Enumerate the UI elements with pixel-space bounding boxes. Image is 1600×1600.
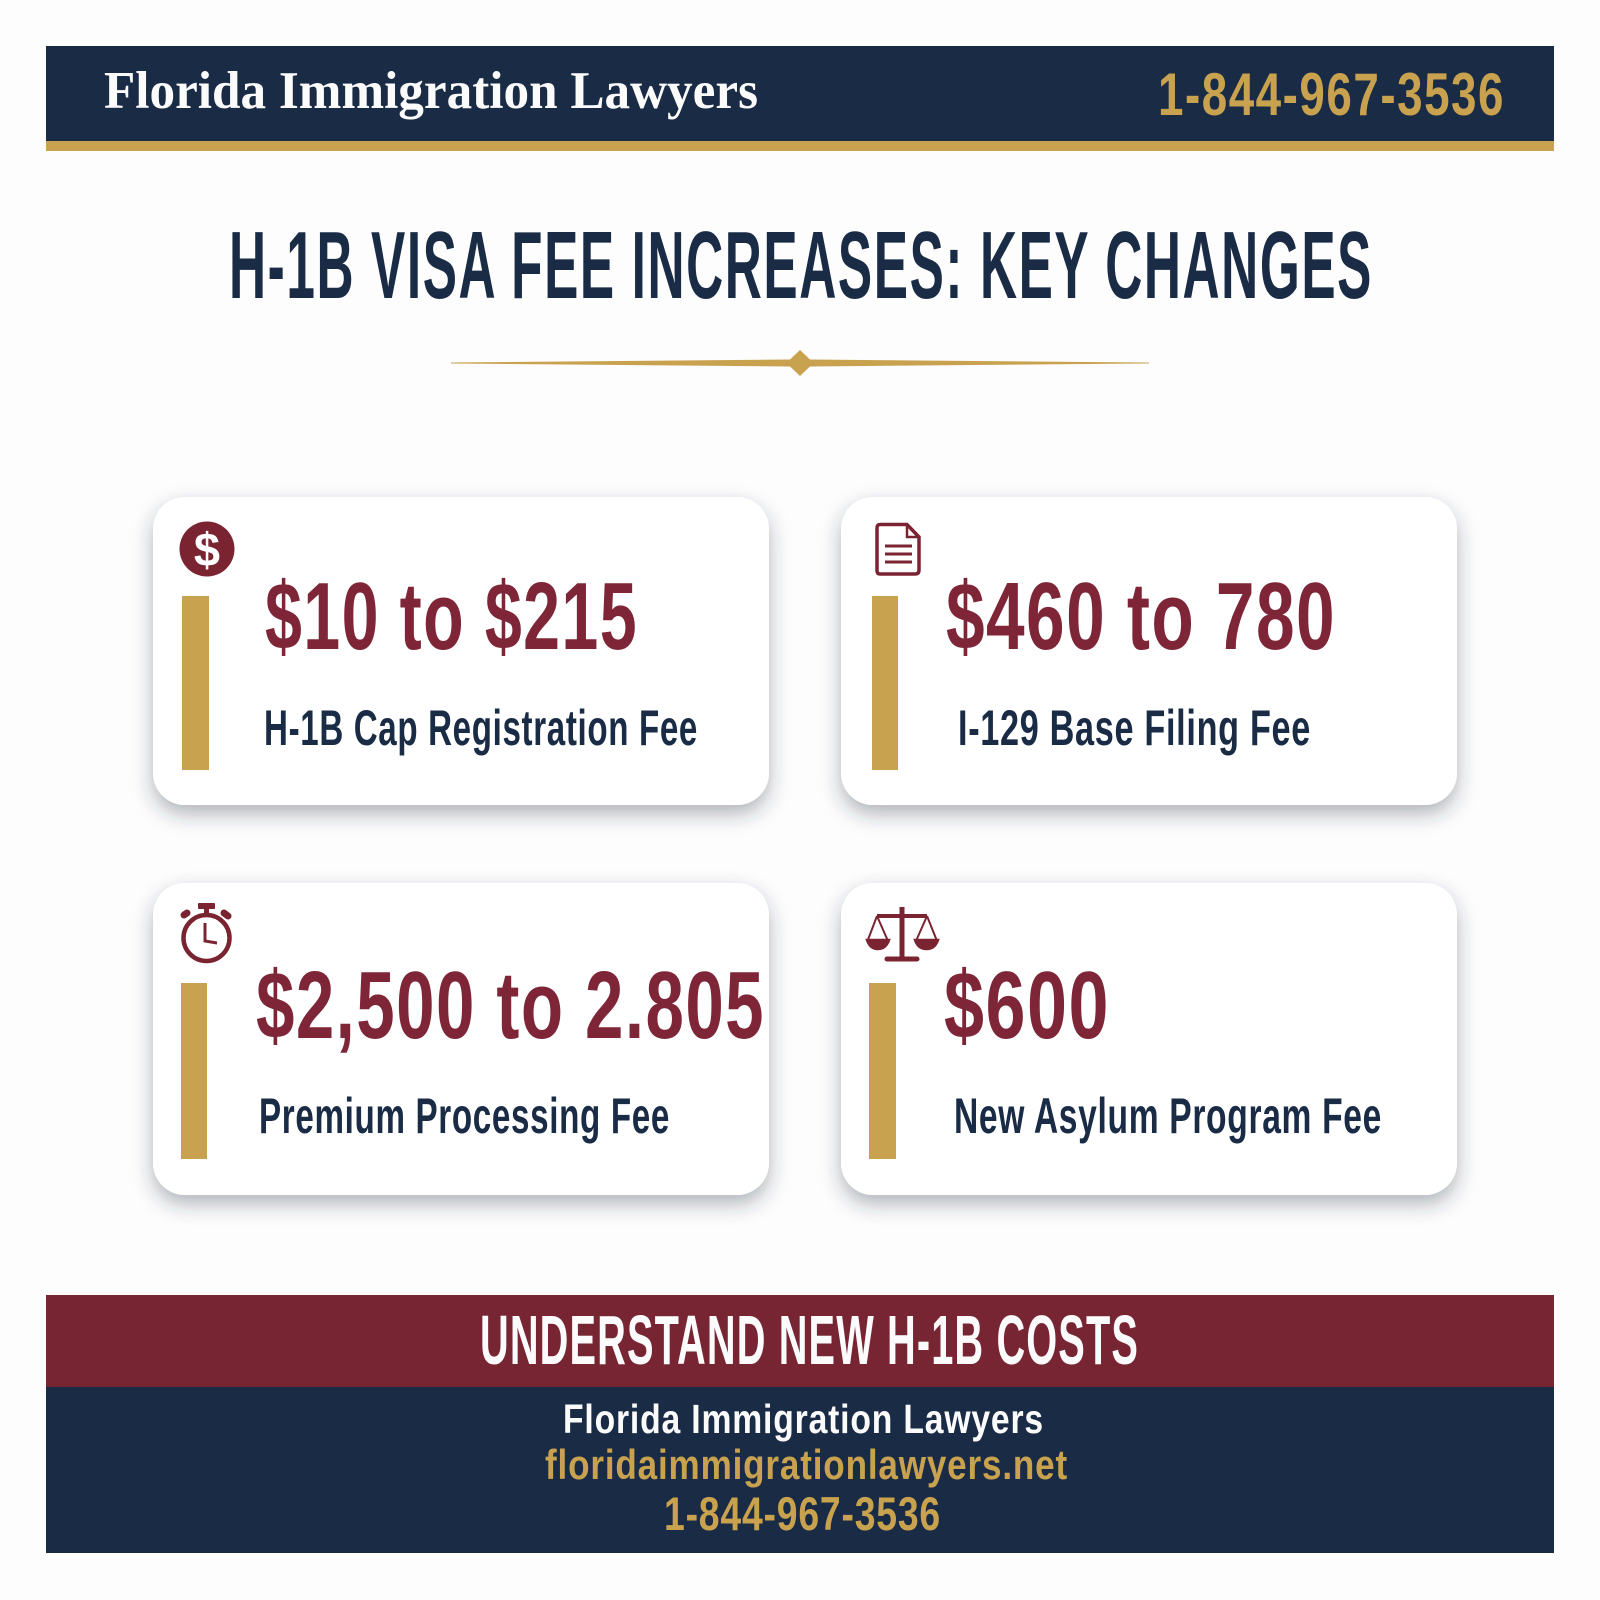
icon: dollar coin — [180, 522, 234, 576]
fee label: New Asylum Program Fee — [954, 1088, 1382, 1144]
icon: stopwatch — [184, 903, 230, 961]
fee amount: $460 to 780 — [946, 563, 1336, 670]
fee amount: $600 — [944, 952, 1110, 1059]
icon: document — [877, 524, 919, 574]
accent bar — [872, 596, 898, 770]
fee label: H-1B Cap Registration Fee — [264, 700, 698, 756]
panel: premium processing fee — [153, 883, 769, 1195]
accent bar — [182, 596, 209, 770]
website: floridaimmigrationlawyers.net — [545, 1441, 1068, 1488]
footer banner — [46, 1295, 1554, 1387]
fee amount: $2,500 to 2.805 — [256, 952, 765, 1059]
firm name: Florida Immigration Lawyers — [563, 1396, 1044, 1442]
phone number: 1-844-967-3536 — [664, 1487, 941, 1540]
fee label: I-129 Base Filing Fee — [958, 700, 1311, 756]
icon: dollar coin: $ — [194, 523, 220, 576]
phone number: 1-844-967-3536 — [1158, 61, 1505, 128]
fee amount: $10 to $215 — [265, 563, 638, 670]
fee label: Premium Processing Fee — [259, 1088, 670, 1144]
header bar — [46, 46, 1554, 151]
footer contact block — [46, 1387, 1554, 1553]
accent bar — [869, 983, 896, 1159]
panel: asylum program fee — [841, 883, 1457, 1195]
accent bar — [181, 983, 207, 1159]
title divider — [451, 350, 1149, 376]
panel: base filing fee — [841, 497, 1457, 805]
firm name: Florida Immigration Lawyers — [104, 62, 758, 120]
icon: scales of justice — [867, 907, 938, 959]
panel: cap registration fee — [153, 497, 769, 805]
